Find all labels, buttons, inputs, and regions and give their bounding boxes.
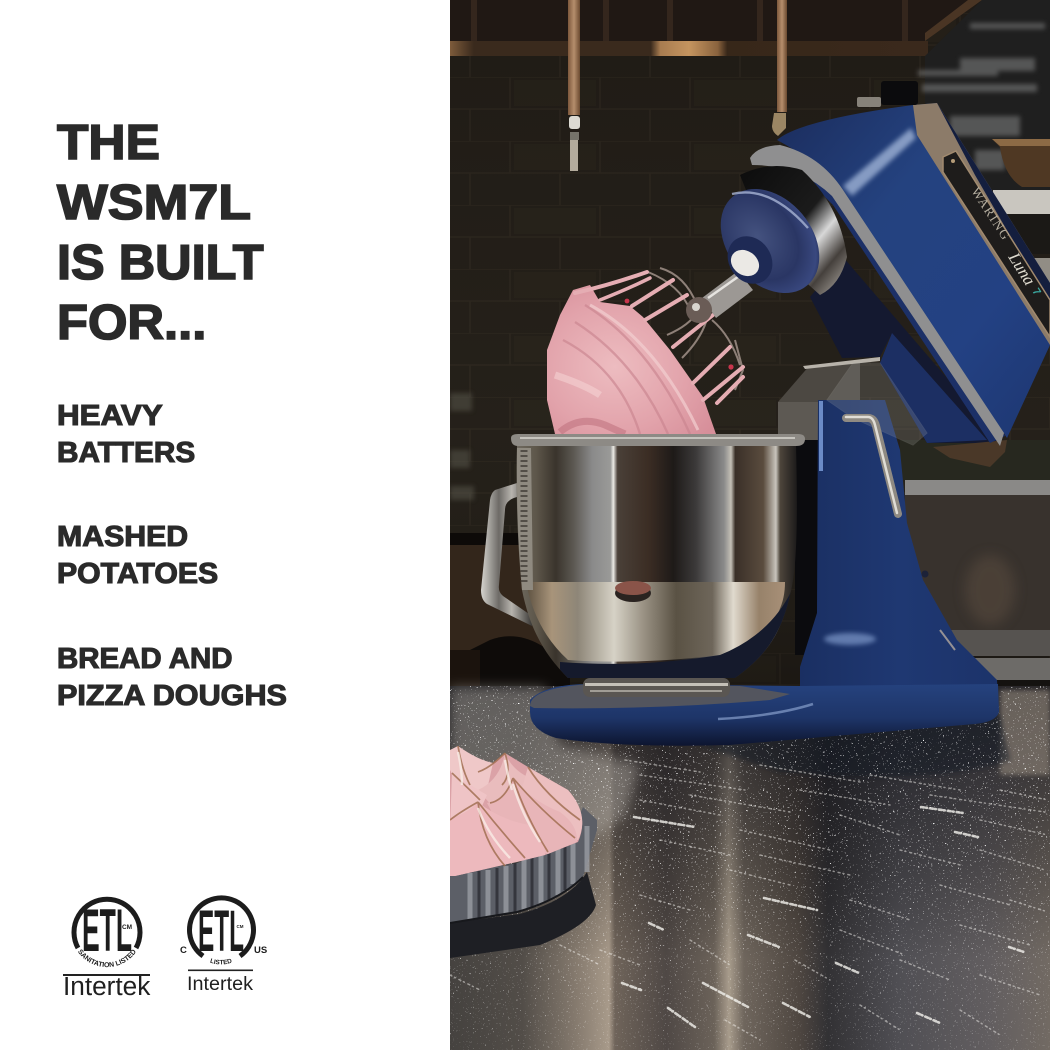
nameplate: 7 (1029, 286, 1043, 298)
bowl handle (481, 483, 532, 626)
toasted ridges (450, 746, 580, 866)
text: heavy batters (57, 400, 195, 469)
steel column block (778, 357, 880, 655)
logo: ETL sanitation listed: ETL (82, 897, 132, 964)
title: IS BUILT (57, 236, 264, 290)
flour specks (450, 686, 1050, 1050)
chrome trim band (750, 145, 1004, 446)
control knobs (857, 81, 918, 107)
title: FOR... (57, 296, 206, 350)
clear guard (827, 363, 927, 445)
bronze trim plate (913, 103, 1050, 345)
meringue underlay (450, 752, 582, 876)
text: bread and pizza doughs: BREAD AND (57, 643, 233, 675)
hanging copper rail right (772, 0, 787, 136)
text: mashed potatoes (57, 521, 218, 590)
tart shadow (450, 872, 596, 958)
panel: text column (0, 0, 450, 1050)
counter reflection of mixer (700, 716, 1010, 776)
meringue peaks (450, 746, 582, 876)
text: bread and pizza doughs (57, 643, 287, 712)
text: mashed potatoes: POTATOES (57, 558, 218, 590)
light patch at right (1000, 690, 1050, 775)
peak mid left (450, 773, 487, 830)
logo: ETL listed C US: CM (236, 924, 244, 929)
mixer pedestal (800, 400, 999, 712)
logo: ETL sanitation listed (63, 896, 151, 1001)
logo: ETL listed C US (180, 895, 267, 995)
logo: ETL listed C US: C (180, 945, 187, 956)
lighter bricks at left (450, 393, 474, 500)
meringue on whisk (547, 285, 716, 434)
meringue tart (450, 746, 597, 958)
hinge plate (933, 440, 1007, 467)
title (56, 116, 264, 350)
dusted area at left (450, 687, 640, 835)
hanging copper rail left (568, 0, 580, 171)
logo: ETL listed C US: US (254, 945, 267, 956)
title: WSM7L (57, 176, 251, 230)
bowl rim (511, 434, 805, 446)
peak back centre (478, 753, 545, 815)
head underside (810, 257, 1000, 443)
mixer base (530, 684, 999, 746)
peak back left (450, 746, 493, 790)
whisk hub and shaft (686, 271, 753, 323)
bowl foot (583, 678, 730, 697)
head body (777, 103, 1050, 438)
chrome planetary ring (740, 166, 847, 295)
kitchen background (450, 0, 1050, 700)
steel counter (450, 686, 1050, 1050)
text: heavy batters: HEAVY (57, 400, 163, 432)
logo: ETL sanitation listed: CM (122, 924, 132, 931)
bowl flour edge (517, 448, 533, 590)
right side shelves (900, 190, 1050, 688)
text: bread and pizza doughs: PIZZA DOUGHS (57, 680, 287, 712)
text: heavy batters: BATTERS (57, 437, 195, 469)
nameplate: Luna (1004, 248, 1039, 289)
upper cabinet (450, 0, 982, 56)
logo: ETL listed C US: LISTED (210, 958, 232, 964)
text: mashed potatoes: MASHED (57, 521, 188, 553)
mixer head (701, 81, 1050, 467)
planetary dome (701, 170, 839, 312)
reflected tart in bowl (615, 581, 651, 602)
nameplate (943, 151, 1050, 337)
tart pan (450, 807, 597, 923)
head blue strip below trim (752, 148, 1005, 443)
logo: ETL sanitation listed: Intertek (63, 971, 151, 1001)
logo: ETL listed C US: Intertek (187, 973, 253, 995)
stand mixer (481, 81, 1050, 746)
panel: product photo (450, 0, 1050, 1050)
certification logos (63, 895, 267, 1001)
bowl lower reflection (526, 582, 800, 680)
logo: ETL sanitation listed: SANITATION LISTED (78, 950, 136, 968)
beater hub (718, 227, 782, 293)
painted brick wall at right (918, 0, 1050, 190)
copper pot on shelf (992, 139, 1050, 187)
nameplate: WARING (968, 184, 1014, 243)
mixing bowl (511, 434, 805, 680)
peak back right (520, 767, 582, 840)
title: THE (57, 116, 160, 170)
head sheen (843, 128, 916, 196)
locking lever (846, 417, 898, 514)
flour streaks (450, 760, 1048, 1040)
peak mid (487, 778, 577, 854)
wire whisk (575, 268, 743, 403)
white beater cap (726, 245, 764, 281)
recess behind bowl (450, 533, 570, 686)
peak front (450, 802, 545, 876)
